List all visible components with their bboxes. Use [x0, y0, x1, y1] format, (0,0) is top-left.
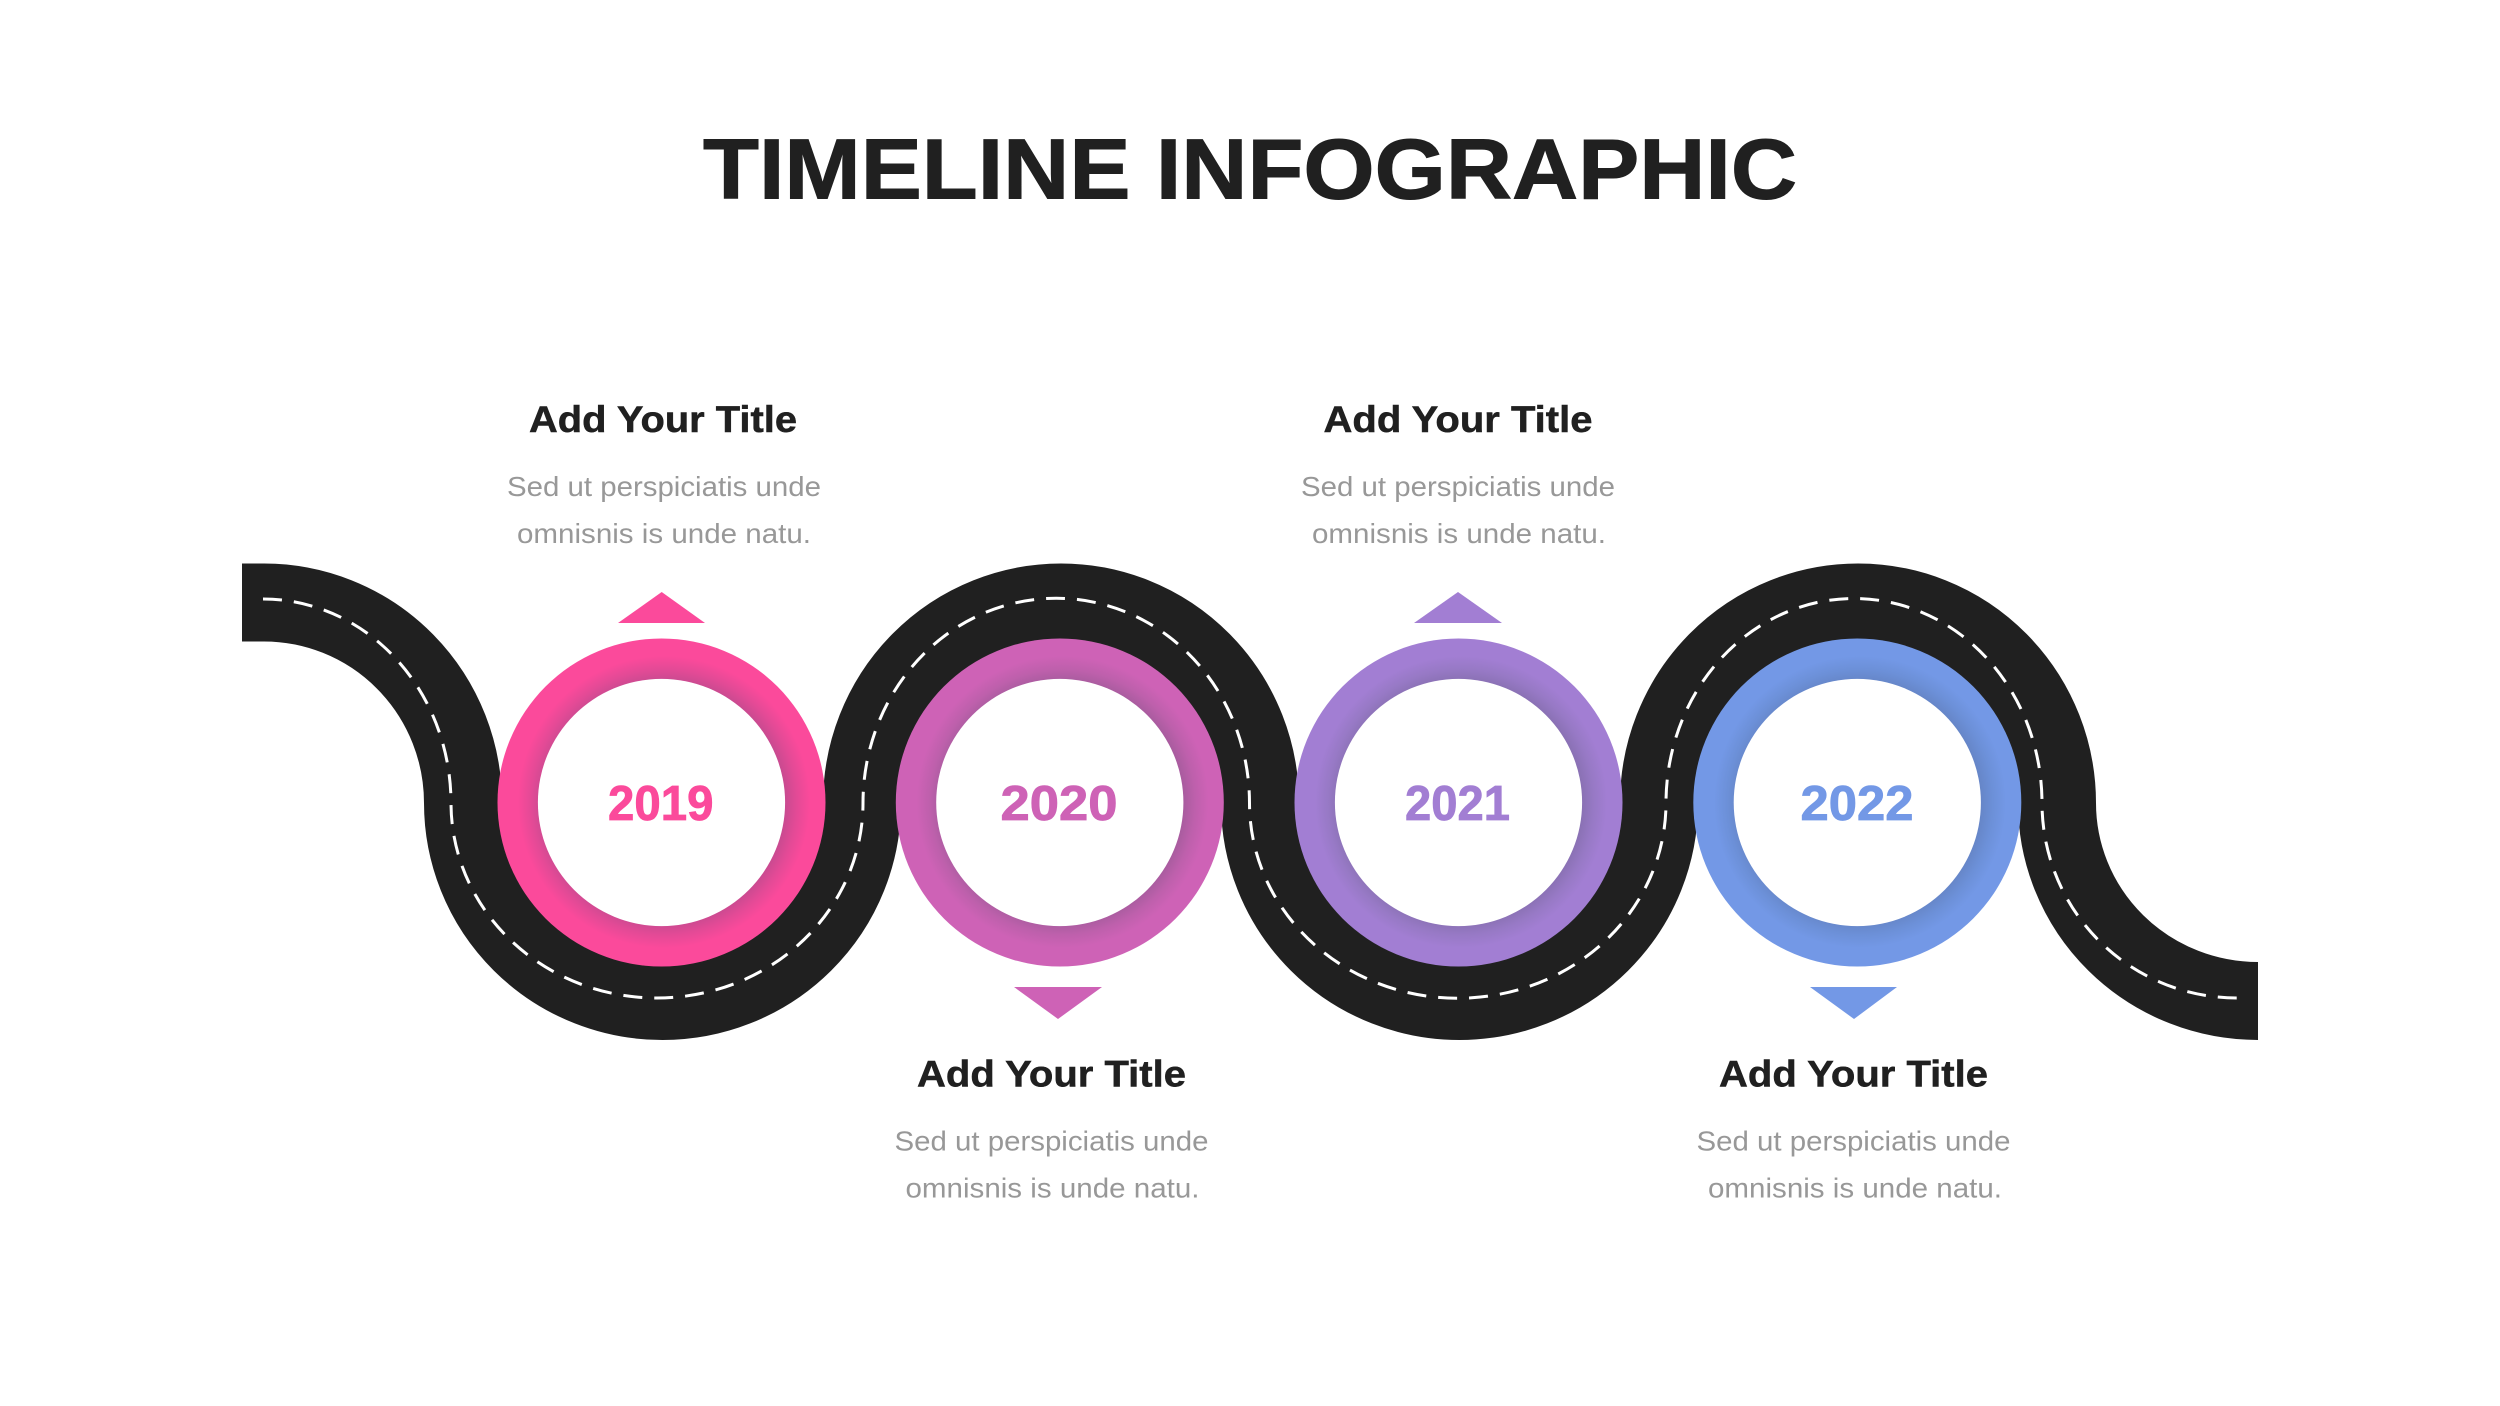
arrow: 2022 down — [1810, 987, 1897, 1019]
text block: 2019: Sed ut perspiciatis unde — [507, 471, 821, 502]
ring: 2020 — [896, 638, 1224, 966]
title: TIMELINE INFOGRAPHIC — [703, 122, 1797, 218]
text block: 2020: Sed ut perspiciatis unde — [894, 1126, 1208, 1156]
year: 2019: 2019 — [608, 777, 714, 831]
ring: 2022 — [1693, 638, 2021, 966]
text block: 2020: omnisnis is unde natu. — [906, 1172, 1200, 1204]
road centre dashes — [263, 598, 2237, 998]
year: 2021: 2021 — [1405, 777, 1510, 831]
text block: 2019: omnisnis is unde natu. — [517, 518, 811, 549]
text block: 2022: omnisnis is unde natu. — [1708, 1172, 2002, 1204]
text block: 2022: Sed ut perspiciatis unde — [1696, 1126, 2010, 1156]
text block: 2021: omnisnis is unde natu. — [1312, 518, 1606, 549]
arrow: 2021 up — [1414, 592, 1502, 623]
text block: 2022: Add Your Title — [1719, 1054, 1988, 1094]
text block: 2021: Sed ut perspiciatis unde — [1301, 471, 1615, 502]
text block: 2019: Add Your Title — [529, 399, 797, 440]
text block: 2020: Add Your Title — [917, 1054, 1186, 1094]
ring: 2021 — [1294, 638, 1622, 966]
arrow: 2019 up — [618, 592, 705, 623]
year: 2022: 2022 — [1800, 777, 1914, 831]
arrow: 2020 down — [1014, 987, 1102, 1019]
year: 2020: 2020 — [1000, 777, 1118, 831]
text block: 2022 — [1696, 1054, 2010, 1204]
text block: 2019 — [507, 399, 821, 549]
road — [242, 598, 2258, 1001]
text block: 2020 — [894, 1054, 1208, 1204]
text block: 2021: Add Your Title — [1324, 399, 1592, 440]
text block: 2021 — [1301, 399, 1615, 549]
ring: 2019 — [498, 638, 826, 966]
